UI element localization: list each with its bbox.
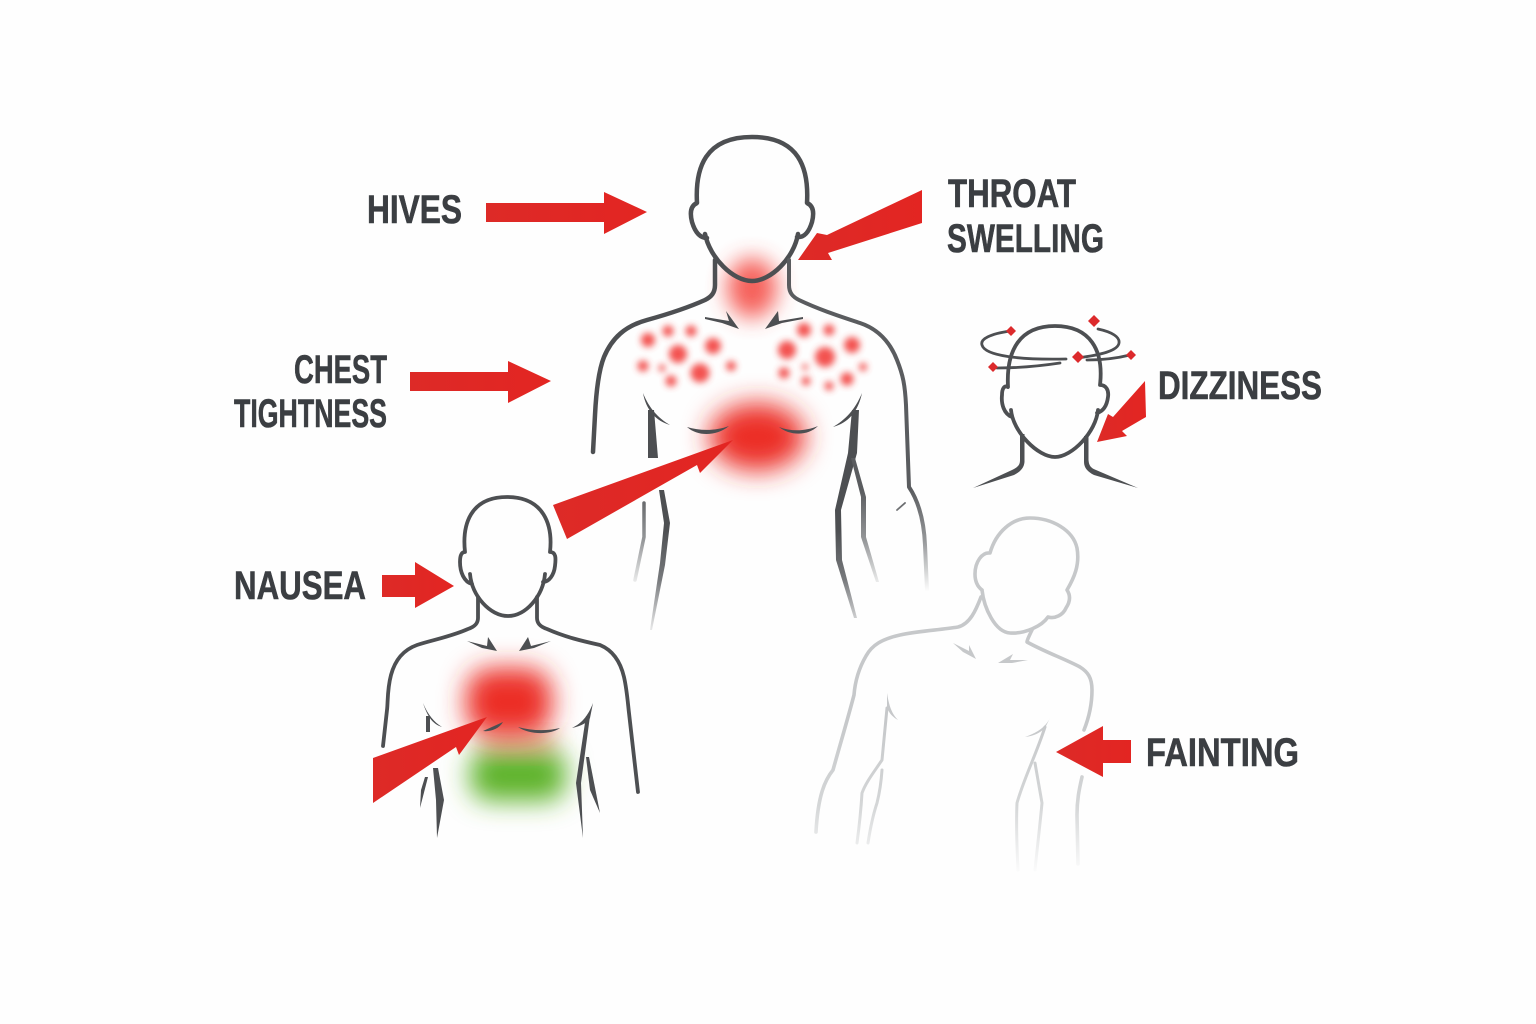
chest contour lines bbox=[483, 722, 503, 731]
arrow: fainting bbox=[1056, 726, 1131, 777]
green: stomach nausea bbox=[470, 749, 566, 801]
head outline bbox=[1002, 326, 1108, 457]
redness: chest bbox=[466, 668, 552, 736]
label: FAINTING: FAINTING bbox=[1146, 731, 1299, 775]
neck and shoulders bbox=[973, 434, 1024, 488]
label: NAUSEA: NAUSEA bbox=[234, 564, 366, 608]
label: DIZZINESS: DIZZINESS bbox=[1158, 364, 1322, 408]
neck and shoulders bbox=[383, 597, 478, 746]
arm and torso lines bbox=[423, 703, 442, 727]
hives: shoulder and chest spots bbox=[638, 323, 867, 390]
arm and torso lines bbox=[635, 503, 644, 580]
head outline bbox=[691, 137, 813, 281]
collar bones bbox=[467, 637, 497, 651]
label: THROAT SWELLING: THROAT bbox=[948, 172, 1076, 216]
arrow: into small body chest bbox=[373, 717, 487, 803]
right shoulder and arm bbox=[1027, 630, 1092, 864]
chest contour lines bbox=[687, 426, 729, 434]
arrow: hives bbox=[486, 192, 647, 234]
arrow: nausea bbox=[382, 562, 454, 608]
arrow: long arrow into main chest bbox=[553, 440, 733, 539]
label: CHEST TIGHTNESS: CHEST bbox=[294, 348, 387, 392]
arrow: dizziness bbox=[1097, 381, 1146, 442]
figure: small body with nausea bbox=[383, 497, 638, 838]
label: CHEST TIGHTNESS bbox=[234, 348, 387, 436]
redness: chest tightness bbox=[709, 403, 805, 471]
label: THROAT SWELLING: SWELLING bbox=[947, 217, 1104, 261]
orange blend between red and green bbox=[484, 734, 554, 754]
head outline bbox=[975, 518, 1078, 633]
figure: dizzy head bbox=[973, 315, 1138, 488]
head outline bbox=[460, 497, 555, 616]
collar bones bbox=[953, 643, 976, 659]
arrow: chest tightness bbox=[410, 361, 551, 403]
redness: throat swelling bbox=[727, 258, 777, 318]
figure: fainting body bbox=[816, 518, 1092, 870]
arrow: throat swelling bbox=[798, 190, 922, 260]
dizzy swirl lines bbox=[982, 329, 1130, 368]
label: CHEST TIGHTNESS: TIGHTNESS bbox=[234, 392, 387, 436]
collar bones bbox=[705, 311, 739, 329]
torso lines bbox=[887, 693, 898, 720]
neck and shoulders bbox=[593, 260, 715, 452]
left shoulder and arm bbox=[816, 597, 981, 832]
label: HIVES: HIVES bbox=[367, 188, 462, 232]
figure: main body bbox=[593, 137, 927, 630]
label: THROAT SWELLING bbox=[947, 172, 1104, 261]
dizzy sparks bbox=[988, 315, 1136, 372]
